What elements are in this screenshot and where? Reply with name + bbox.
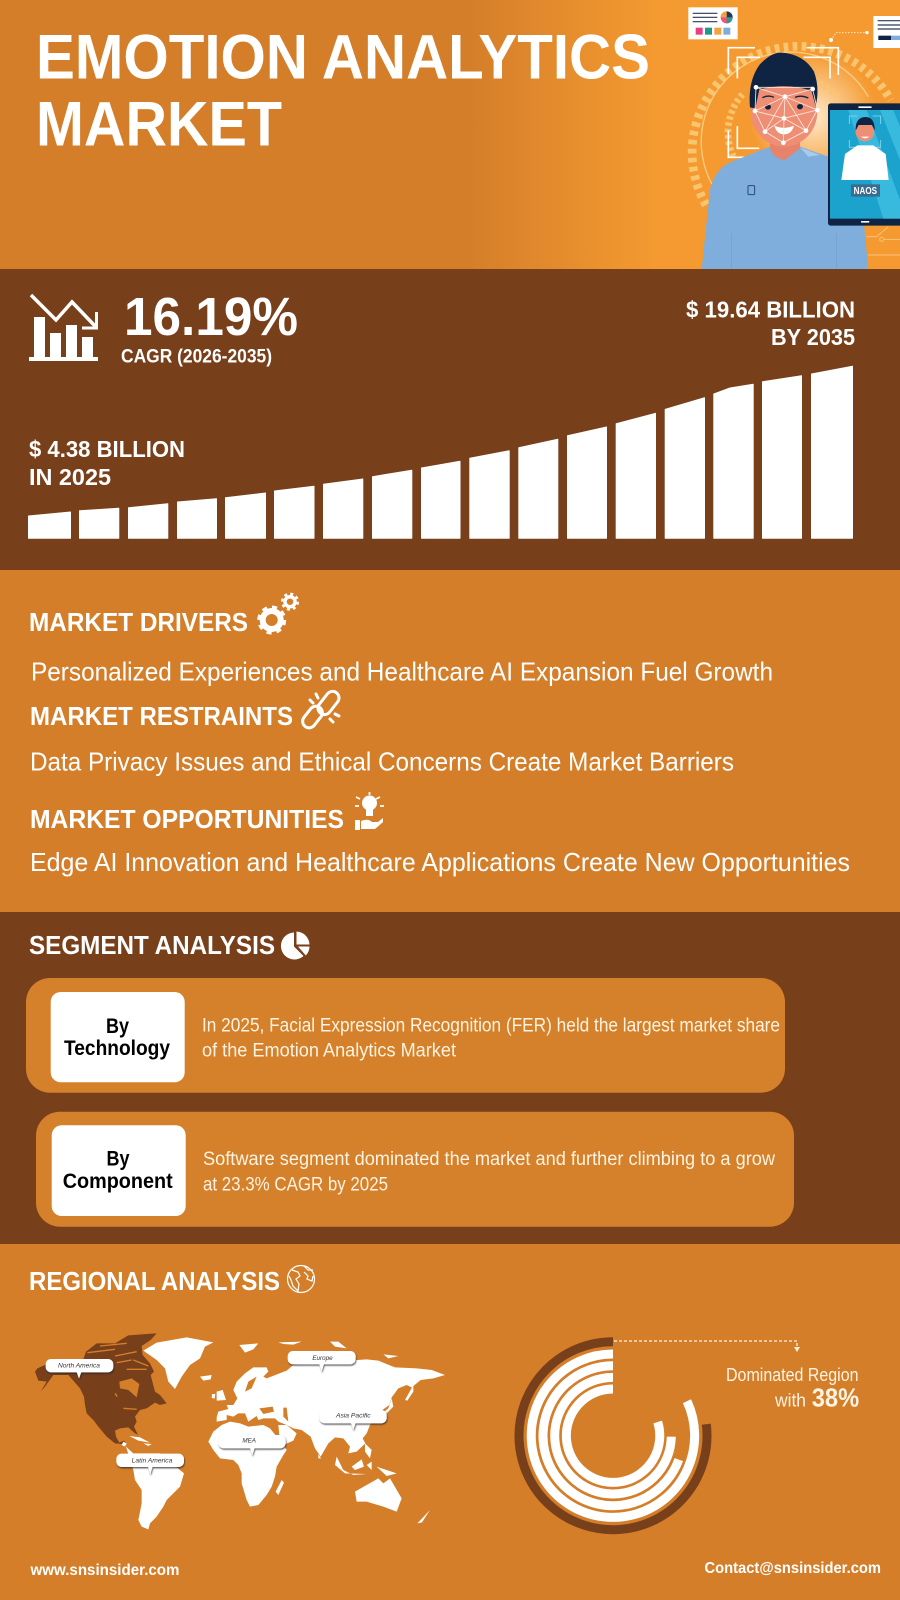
callout: dominated region: 38% — [812, 1383, 859, 1413]
head — [751, 77, 817, 147]
label: 2035 value: BY 2035 — [771, 324, 855, 350]
card: by technology: of the Emotion Analytics Market — [202, 1041, 457, 1062]
map labels — [46, 1351, 387, 1474]
label: 2025 value: $ 4.38 BILLION — [29, 436, 185, 462]
illustration: face recognition scan — [688, 7, 900, 269]
heading: segment analysis: SEGMENT ANALYSIS — [29, 930, 275, 960]
data cards — [688, 7, 738, 39]
card: by technology: In 2025, Facial Expression Recognition (FER) held the largest market share — [202, 1016, 780, 1037]
label: 2025 value: IN 2025 — [29, 464, 111, 490]
label: 2025 value — [29, 436, 185, 490]
body — [702, 147, 868, 269]
icon: pie chart — [281, 932, 310, 959]
card: by component: Software segment dominated the market and further climbing to a grow — [203, 1149, 775, 1170]
card: by component: By — [106, 1148, 130, 1171]
label: 2035 value: $ 19.64 BILLION — [686, 297, 855, 323]
CAGR value: 16.19% — [124, 287, 298, 347]
text: opportunities: Edge AI Innovation and Healthcare Applications Create New Opportunities — [30, 847, 850, 877]
map: world: North America — [58, 1363, 100, 1370]
card: by technology — [26, 978, 785, 1093]
map: world: Asia Pacific — [335, 1412, 371, 1419]
CAGR value: CAGR (2026-2035) — [121, 347, 272, 368]
icon: chart with arrow — [29, 295, 98, 361]
footer: website: www.snsinsider.com — [30, 1562, 179, 1579]
heading: market opportunities: MARKET OPPORTUNITIES — [30, 804, 344, 834]
arrow: dotted leader — [614, 1341, 800, 1352]
icon: gears — [259, 594, 298, 633]
tablet — [828, 103, 900, 226]
map: world — [35, 1333, 445, 1529]
title — [36, 23, 650, 159]
card: by technology: By — [106, 1015, 129, 1038]
callout: dominated region — [726, 1365, 859, 1413]
bar chart — [28, 366, 852, 538]
panel: regional analysis — [0, 1244, 900, 1600]
card: by component — [36, 1112, 794, 1227]
heading: regional analysis: REGIONAL ANALYSIS — [29, 1266, 280, 1296]
map: world: MEA — [242, 1438, 257, 1445]
card: by technology: Technology — [64, 1037, 170, 1060]
title: EMOTION ANALYTICS — [36, 23, 650, 93]
heading: market drivers: MARKET DRIVERS — [29, 607, 248, 637]
card: by component: Component — [63, 1170, 173, 1193]
card: by component: at 23.3% CAGR by 2025 — [203, 1175, 388, 1196]
panel: market size — [0, 269, 900, 570]
panel: segment analysis — [0, 912, 900, 1244]
footer: contact: Contact@snsinsider.com — [704, 1560, 881, 1577]
icon: broken link — [300, 689, 342, 730]
map: world: Latin America — [132, 1457, 173, 1464]
text: restraints: Data Privacy Issues and Ethical Concerns Create Market Barriers — [30, 747, 734, 777]
heading: market restraints: MARKET RESTRAINTS — [30, 701, 293, 731]
map region: North America — [35, 1333, 167, 1444]
text: drivers: Personalized Experiences and Healthcare AI Expansion Fuel Growth — [31, 657, 773, 687]
illustration: face recognition scan: NAOS — [854, 186, 877, 197]
chart: radial share — [519, 1342, 707, 1530]
icon: globe — [288, 1266, 314, 1292]
icon: idea in hand — [355, 792, 384, 830]
panel: header — [0, 0, 900, 270]
label: 2035 value — [686, 297, 855, 350]
map: other continents — [122, 1337, 445, 1529]
panel: market dynamics — [0, 570, 900, 912]
map: world: Europe — [312, 1355, 333, 1362]
title: MARKET — [36, 89, 282, 159]
callout: dominated region: Dominated Region — [726, 1365, 858, 1385]
callout: dominated region: with — [774, 1391, 806, 1411]
